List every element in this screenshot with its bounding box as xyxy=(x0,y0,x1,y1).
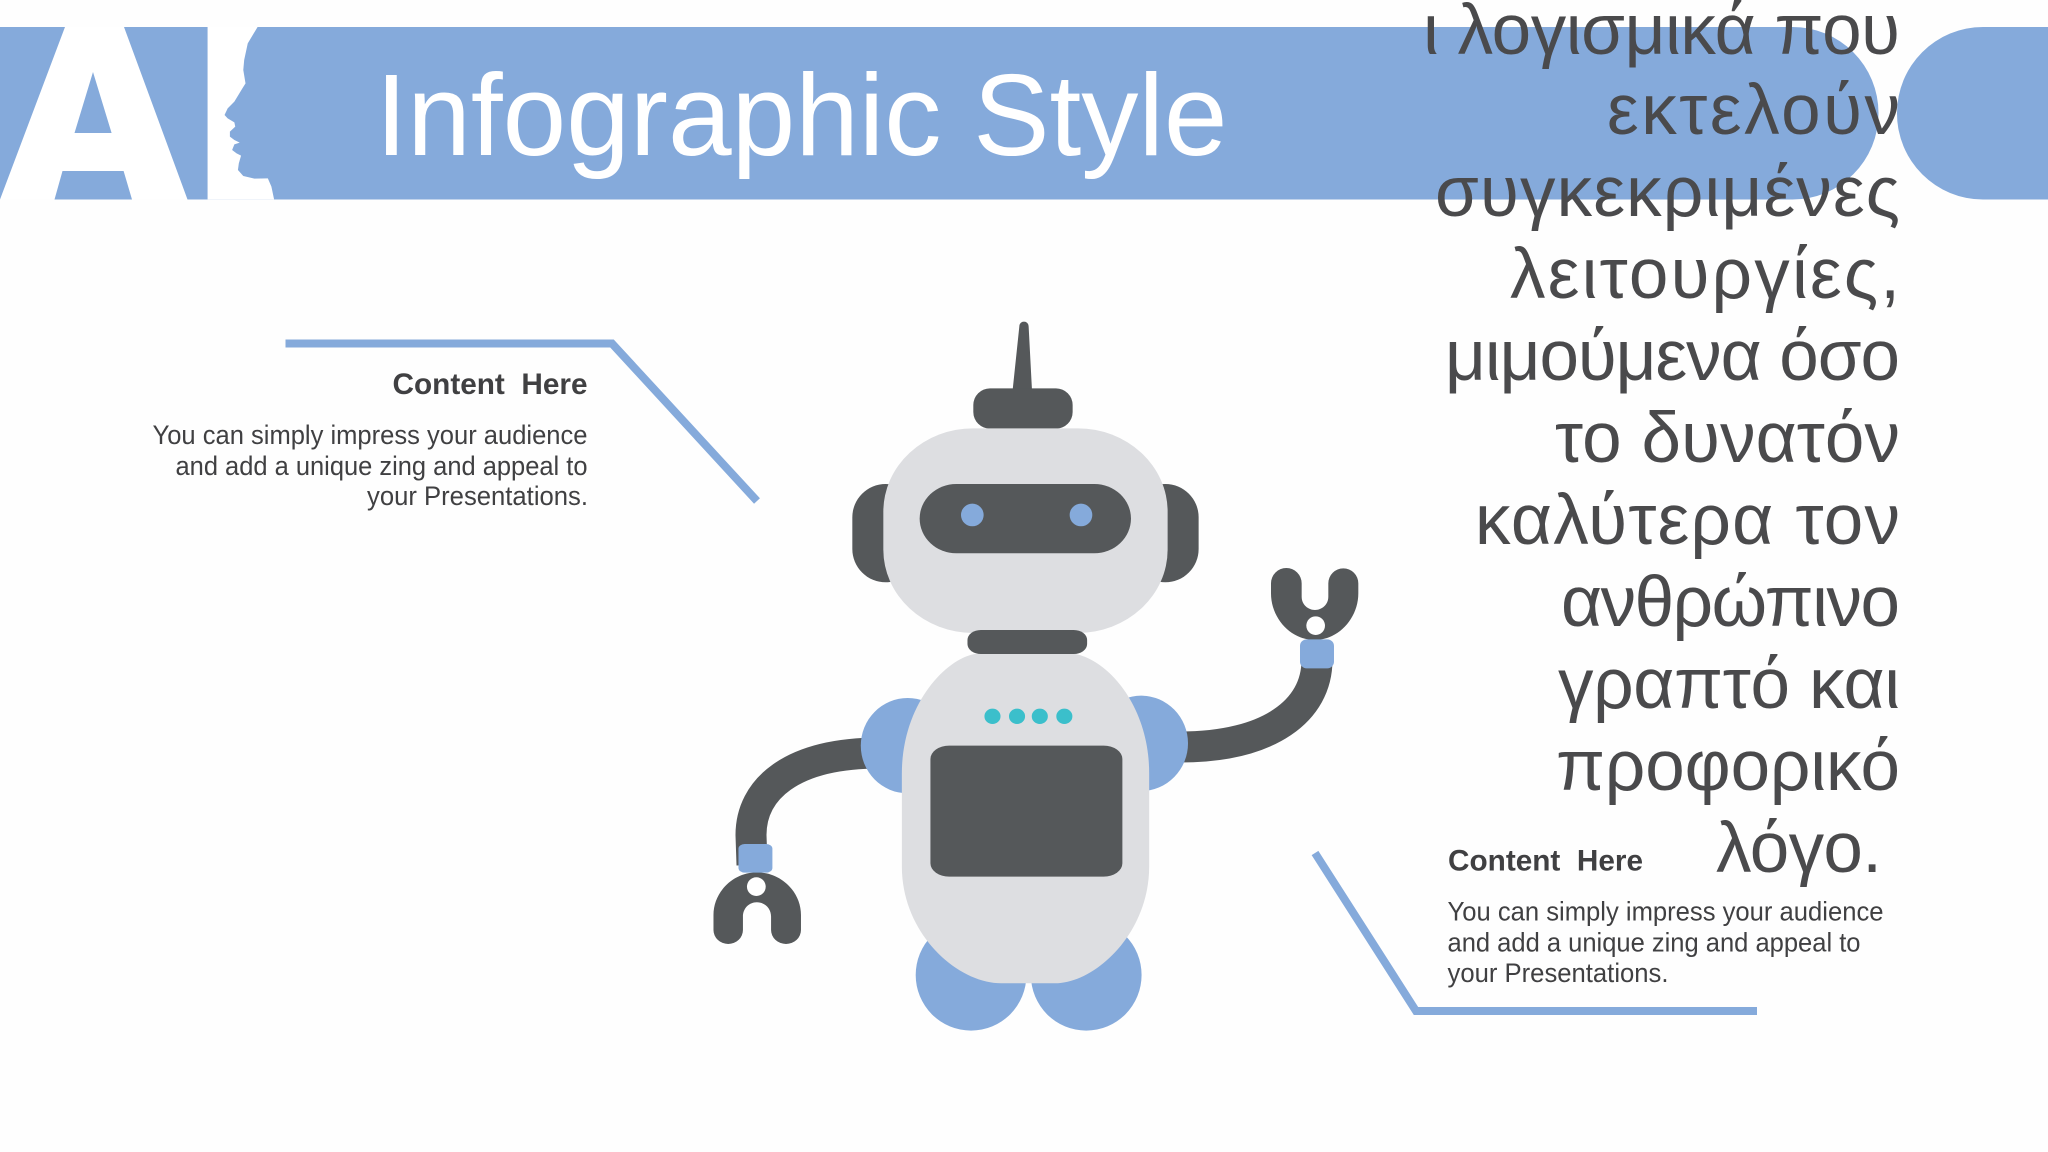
icon: AI letters with head silhouette xyxy=(0,27,274,200)
callout text: bottom right: your Presentations. xyxy=(1448,958,1668,988)
right ear xyxy=(1132,484,1199,582)
left foot xyxy=(916,919,1026,1031)
right foot xyxy=(1031,919,1142,1031)
callout text: bottom right: and add a unique zing and appeal to xyxy=(1448,928,1860,958)
callout text: top left: your Presentations. xyxy=(367,481,588,511)
right eye xyxy=(1070,504,1092,526)
header banner xyxy=(0,27,2048,200)
left hand xyxy=(713,872,801,944)
overflowing Greek text block: ανθρώπινο xyxy=(1561,563,1900,642)
overflowing Greek text block: γραπτό και xyxy=(1558,645,1900,724)
right hand hole xyxy=(1306,616,1325,635)
indicator lights xyxy=(984,709,1072,724)
robot illustration xyxy=(713,322,1358,1031)
overflowing Greek text block: λόγο. xyxy=(1716,809,1882,888)
right arm xyxy=(1180,660,1317,747)
overflowing Greek text block: προφορικό xyxy=(1556,727,1900,806)
callout text: top left: You can simply impress your audience xyxy=(152,420,588,450)
robot head xyxy=(852,322,1199,633)
overflowing Greek text block: λειτουργίες, xyxy=(1510,235,1900,314)
callout text: top left xyxy=(152,420,588,511)
right wrist xyxy=(1300,639,1334,668)
overflowing Greek text block: συγκεκριμένες xyxy=(1435,153,1900,232)
torso xyxy=(902,654,1149,983)
callout line: top left xyxy=(286,344,757,501)
callout: top left xyxy=(152,344,757,511)
antenna base xyxy=(973,388,1073,429)
head shell xyxy=(883,428,1168,633)
antenna xyxy=(1013,322,1032,390)
visor xyxy=(920,484,1131,553)
chest screen xyxy=(930,746,1122,877)
right shoulder xyxy=(1094,696,1188,791)
callout text: bottom right: You can simply impress your audience xyxy=(1448,897,1884,927)
overflowing Greek text block: μιμούμενα όσο xyxy=(1445,317,1900,396)
left ear xyxy=(852,484,919,582)
callout: bottom right xyxy=(1315,845,1884,1011)
overflowing Greek text block: καλύτερα τον xyxy=(1475,481,1900,560)
callout heading: top left: Content Here xyxy=(392,368,588,401)
neck xyxy=(967,630,1087,654)
left wrist xyxy=(738,844,772,873)
callout heading: bottom right: Content Here xyxy=(1448,845,1643,878)
left hand hole xyxy=(747,877,766,896)
title: Infographic Style xyxy=(376,50,1228,180)
left shoulder xyxy=(861,698,955,793)
robot body xyxy=(713,630,1188,1031)
left eye xyxy=(961,504,984,526)
callout text: bottom right xyxy=(1448,897,1884,988)
callout line: bottom right xyxy=(1315,853,1757,1011)
overflowing Greek text block: το δυνατόν xyxy=(1555,399,1900,478)
callout text: top left: and add a unique zing and appeal to xyxy=(176,451,588,481)
overflowing Greek text block: εκτελούν xyxy=(1607,71,1900,150)
left arm xyxy=(751,753,880,865)
right hand xyxy=(1271,568,1358,668)
overflowing Greek text block xyxy=(1423,0,1900,888)
